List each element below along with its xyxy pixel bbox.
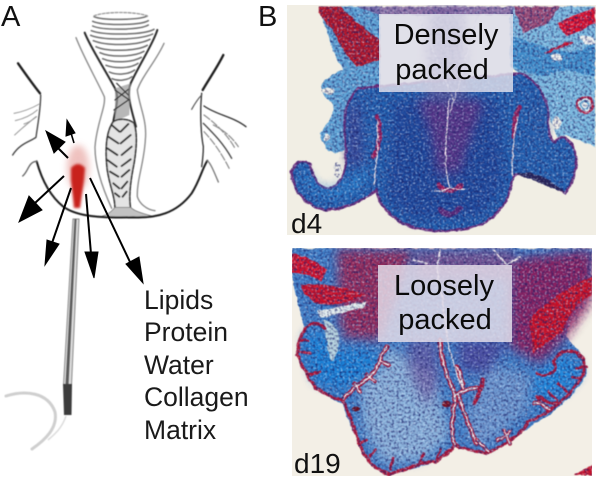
vaginal vault [37,161,207,218]
right lobe dark cut [517,173,565,193]
pale stroma left [360,347,450,463]
pale slit and channel [317,302,367,318]
arrow: down left [45,188,71,265]
darker core [387,100,503,220]
callout: Loosely packed: Loosely [394,270,494,302]
arrow: upper left [46,131,68,158]
panel label A: A [1,1,21,33]
cervix funnel dark edges [85,30,157,127]
text: measured components: Matrix [144,415,216,445]
right wall [201,93,203,167]
saturated blue lobes [303,331,380,390]
callout: Densely packed: Densely [394,19,499,51]
text: measured components: Lipids [144,285,213,315]
dark red/white glands [343,250,557,452]
fibre cable [6,393,55,449]
icon: optical fibre probe [6,219,79,449]
base of canal [100,207,153,217]
icon: red light glow from probe tip [67,145,89,208]
panel label B: B [258,1,277,33]
dense tissue body [292,73,577,231]
text: measured components: Water [144,350,214,380]
small vessel ring [577,97,593,113]
panel B bottom: histology d19 [292,248,592,476]
muscle red [318,7,380,67]
canal neck hatch [115,83,131,122]
arrow: lower left [19,176,64,222]
purple upper tissue [337,250,413,340]
epithelial fingers [300,340,587,470]
scalloped red epithelium outline [297,323,587,474]
corner red fragment [573,464,592,475]
label: d19: d19 [294,448,341,479]
panel A: anatomy diagram [13,12,246,218]
callout: Densely packed [379,14,513,92]
cervix outer lines [76,38,164,211]
probe handle [63,384,72,415]
arrow: down centre [85,194,98,278]
loose connective tissue [318,7,380,153]
upper rings [91,16,154,80]
probe shaft [64,219,79,385]
white lumen lines [372,72,520,193]
left wall [13,95,41,155]
text: measured components: Protein [144,317,228,347]
tissue body [292,248,592,473]
callout: Loosely packed: packed [398,304,492,336]
red/magenta epithelium inside [373,107,520,214]
arrow: down right [90,178,143,283]
arrows: light and signal paths [19,120,143,283]
label: d4: d4 [291,208,322,239]
callout: Densely packed: packed [395,54,489,86]
text: measured components: Collagen [144,382,249,412]
red muscle [292,253,327,282]
canal folds [106,119,136,208]
pale stroma right [467,363,533,447]
panel B top: histology d4 [287,5,596,235]
white holes [333,163,341,177]
text: measured components [144,285,249,445]
arrow: up small [66,120,75,143]
callout: Loosely packed [378,265,512,342]
